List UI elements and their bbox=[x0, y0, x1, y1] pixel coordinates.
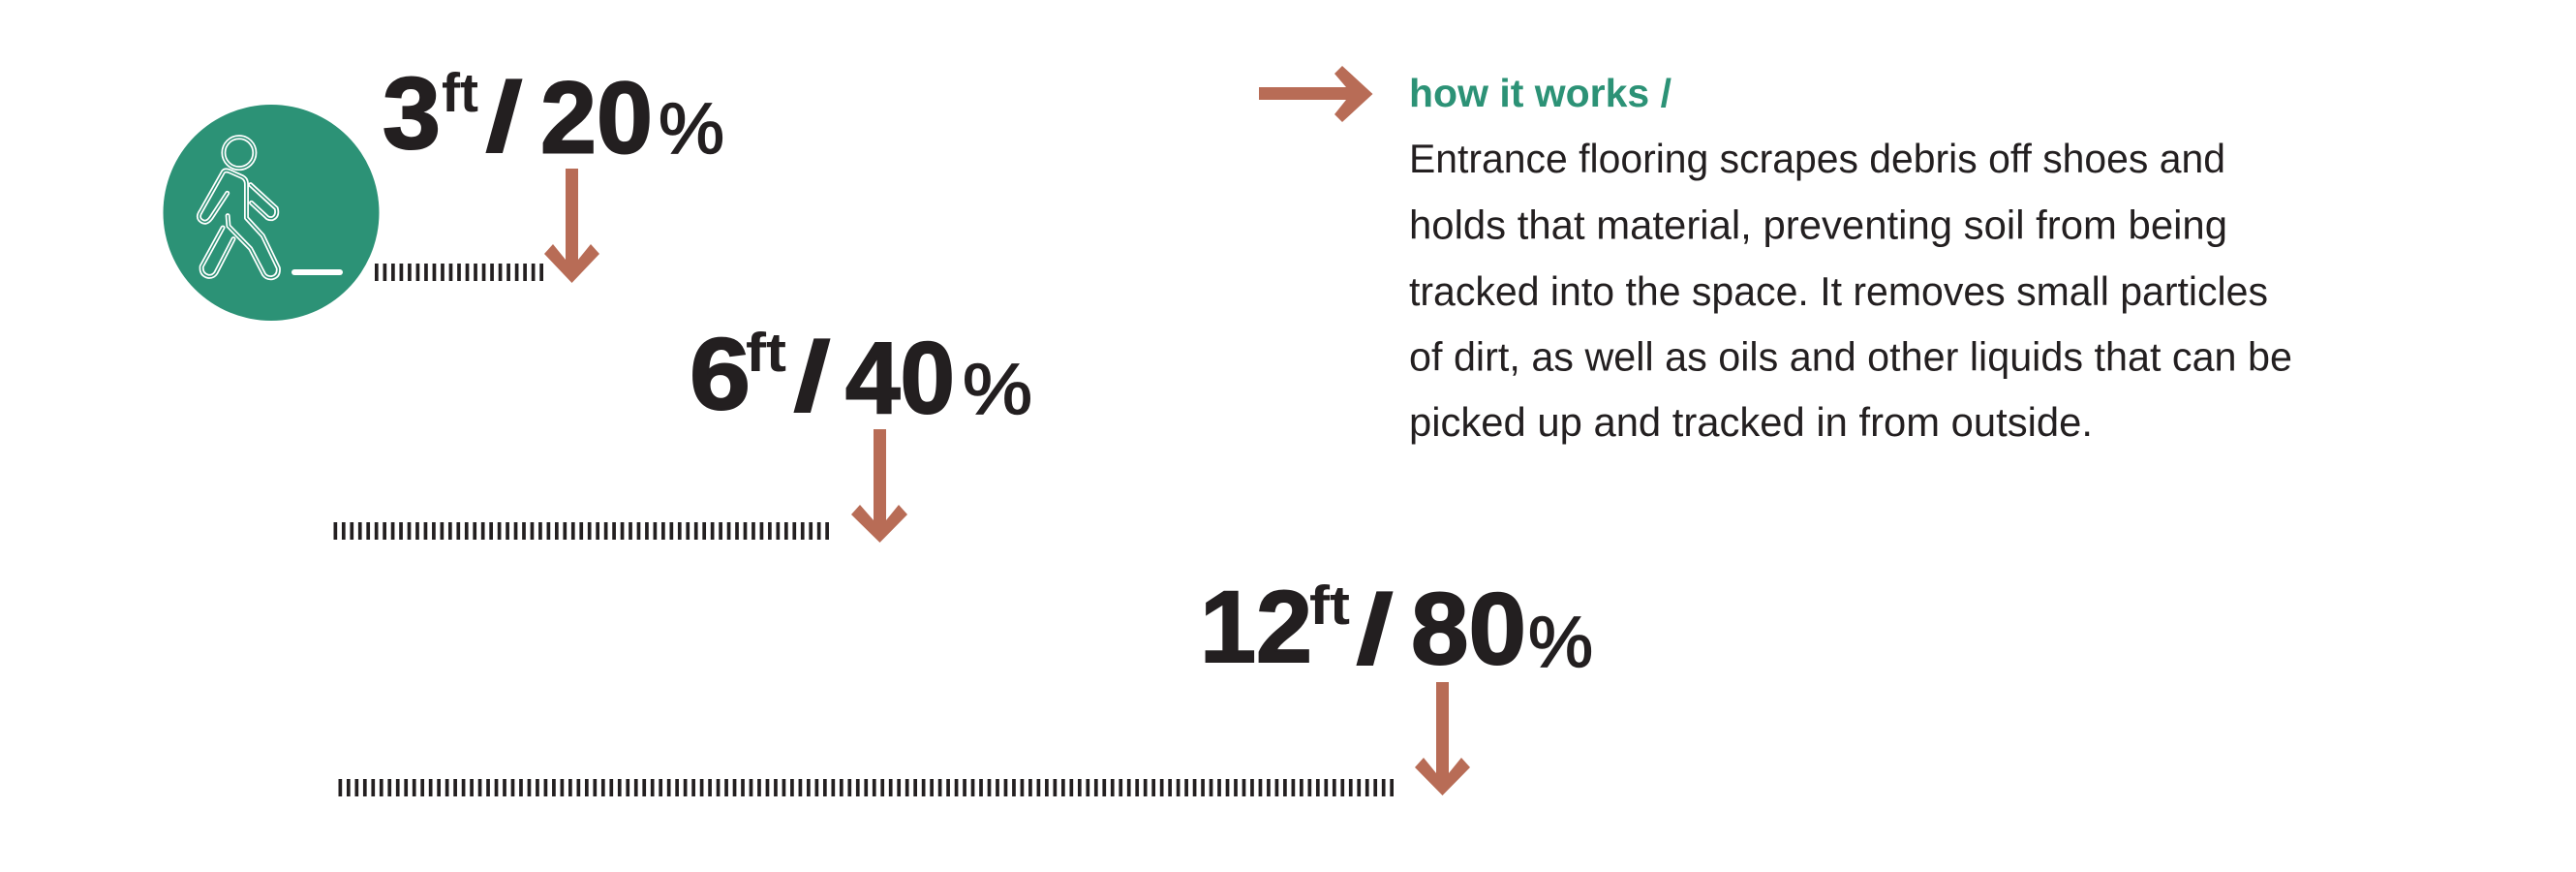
text block: explanation bbox=[1409, 136, 2292, 445]
text block: explanation: Entrance flooring scrapes debris off shoes and bbox=[1409, 136, 2225, 181]
value label: ft bbox=[1309, 575, 1350, 637]
value label: 80 bbox=[1411, 573, 1526, 686]
value label: 20 bbox=[540, 62, 653, 174]
value label bbox=[690, 318, 1032, 435]
floor dash bbox=[291, 269, 343, 275]
value label: / bbox=[792, 321, 832, 432]
value label: 6 bbox=[690, 318, 751, 431]
dashed distance line bbox=[375, 264, 543, 281]
dashed distance line bbox=[339, 779, 1394, 796]
text block: explanation: holds that material, preventing soil from being bbox=[1409, 202, 2227, 248]
value label: / bbox=[484, 61, 524, 172]
value label: 3 bbox=[383, 57, 441, 171]
dashed distance line bbox=[333, 522, 829, 540]
arrow: right bbox=[1259, 66, 1373, 122]
arrow: down bbox=[851, 429, 907, 543]
text block: explanation: of dirt, as well as oils and other liquids that can be bbox=[1409, 333, 2292, 380]
value label: 40 bbox=[845, 322, 955, 435]
green circle bbox=[163, 105, 380, 321]
value label: ft bbox=[746, 322, 786, 384]
text block: explanation: picked up and tracked in from outside. bbox=[1409, 399, 2093, 445]
icon: walking person in green circle bbox=[163, 105, 380, 321]
arrow: down bbox=[1415, 682, 1470, 795]
value label: % bbox=[1528, 602, 1593, 682]
row: 3ft 20 percent bbox=[375, 57, 724, 283]
row: 12ft 80 percent bbox=[339, 571, 1593, 795]
text block: explanation: tracked into the space. It removes small particles bbox=[1409, 268, 2268, 314]
value label: 12 bbox=[1200, 571, 1312, 684]
value label bbox=[1200, 571, 1593, 686]
value label: / bbox=[1355, 574, 1395, 685]
value label bbox=[383, 57, 724, 174]
arrow: down bbox=[544, 169, 599, 283]
heading: how it works: how it works / bbox=[1409, 71, 1671, 115]
value label: % bbox=[963, 349, 1032, 429]
value label: % bbox=[659, 88, 724, 169]
person figure bbox=[199, 138, 278, 278]
value label: ft bbox=[442, 62, 478, 124]
row: 6ft 40 percent bbox=[333, 318, 1032, 543]
